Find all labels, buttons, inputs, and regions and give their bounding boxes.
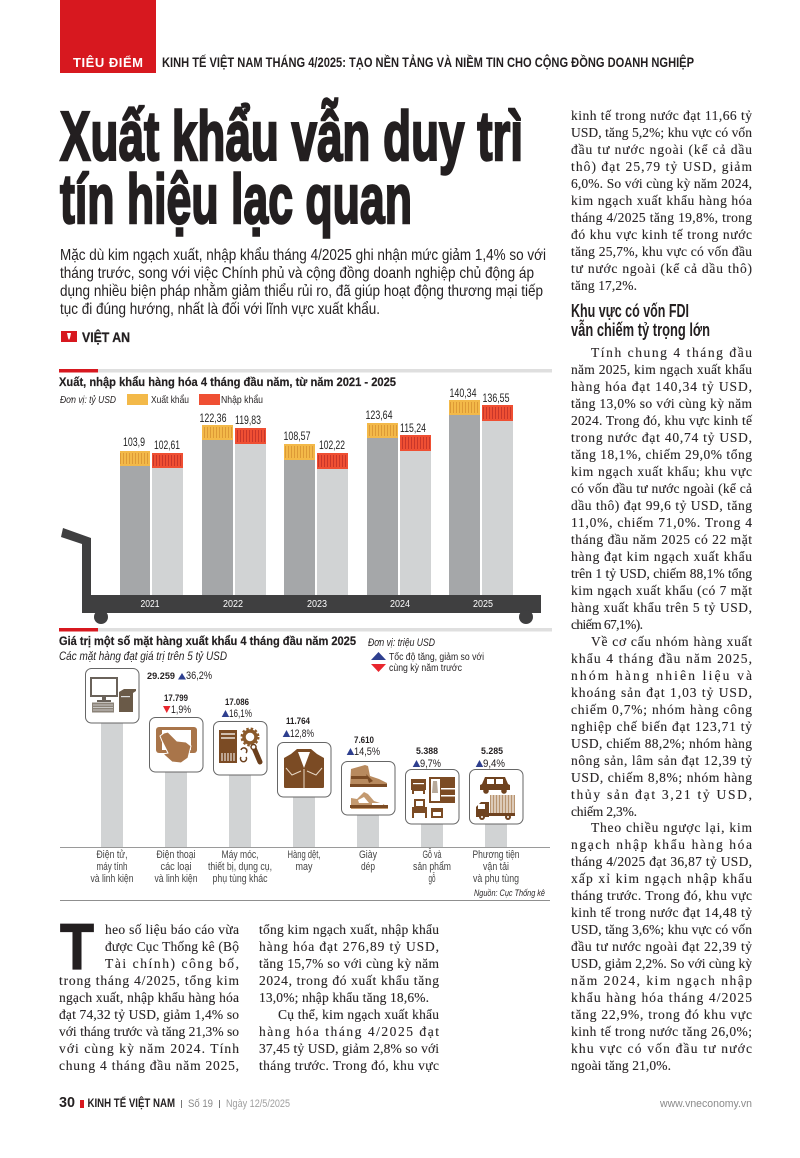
icon: shirt: [284, 749, 324, 788]
body column 3: top text: đó khu vực kinh tế trong nước: [571, 227, 752, 242]
body column 3: main text: nghiệp chế biến đạt 123,71 tỷ: [571, 719, 752, 734]
item: wood products: 5.388: [416, 746, 438, 757]
body column 3: main text: xấp xỉ kim ngạch nhập khẩu: [571, 871, 752, 886]
body column 3: main text: khoáng sản đạt 1,03 tỷ USD,: [571, 685, 752, 700]
item: machinery: phụ tùng khác: [212, 873, 268, 885]
body column 2: tổng kim ngạch xuất, nhập khẩu: [259, 922, 439, 937]
unit and legend: [368, 637, 484, 674]
body column 3: top text: 6,0%. So với cùng kỳ năm 2024,: [571, 176, 752, 191]
magazine name: KINH TẾ VIỆT NAM: [88, 1095, 175, 1110]
item: vehicles: và phụ tùng: [473, 873, 519, 885]
header: section tab and running title: [60, 0, 694, 73]
body column 1: ngạch xuất, nhập khẩu hàng hóa: [59, 990, 239, 1005]
item: vehicles: [470, 746, 523, 885]
body column 3: main text: Tính chung 4 tháng đầu: [591, 345, 752, 360]
item: phones: các loại: [160, 861, 192, 873]
bars 2022: 119,83: [235, 415, 261, 427]
body column 3: top text: tăng 25,7%, khu vực có vốn đầu: [571, 244, 752, 259]
body column 1: được Cục Thống kê (Bộ: [105, 939, 239, 954]
body column 2: 2024, trong đó xuất khẩu tăng: [259, 973, 439, 988]
item: footwear: [342, 735, 395, 873]
body column 3: top text: tăng 17,2%.: [571, 278, 637, 293]
bars 2023: [284, 431, 348, 610]
item: electronics and computers: 36,2%: [186, 670, 212, 682]
bars 2022: 2022: [223, 599, 243, 610]
body column 3: main text: tháng đầu năm 2025 có 22 mặt: [571, 532, 752, 547]
red section tab: [60, 0, 156, 73]
icon: furniture: [411, 777, 455, 818]
body column 3: main text: tháng 4/2025 đạt 36,87 tỷ USD,: [571, 854, 752, 869]
chart: main export items: [59, 628, 552, 901]
item: phones: [150, 693, 203, 885]
item: electronics and computers: máy tính: [96, 861, 128, 873]
item: vehicles: Phương tiện: [472, 849, 520, 861]
section label: TIÊU ĐIỂM: [73, 55, 143, 70]
item: wood products: [406, 746, 459, 885]
body column 2: 13,0%; nhập khẩu tăng 18,6%.: [259, 990, 429, 1005]
bars 2022: 122,36: [200, 413, 226, 425]
body column 3: main text: tăng 22,9%, trong đó khu vực: [571, 1007, 752, 1022]
body column 3: main text: 11,0%, chiếm 71,0%. Trong 4: [571, 515, 752, 530]
body column 3: top text: kim ngạch xuất khẩu hàng hóa: [571, 193, 752, 208]
body column 3: main text: [571, 345, 753, 1073]
body column 3: main text: 2024. Trong đó, khu vực kinh tế: [571, 413, 753, 428]
body column 3: main text: nông sản, lâm sản đạt 12,39 tỷ: [571, 753, 752, 768]
body column 3: main text: USD, tăng 3,6%; khu vực có vốn: [571, 922, 752, 937]
icon: computer: [91, 678, 136, 712]
bar chart: imports and exports 2021-2025: [59, 369, 552, 624]
body column 2: tháng trước. Trong đó, khu vực: [259, 1058, 439, 1073]
bars 2023: 2023: [307, 599, 327, 610]
body column 3: main text: chiếm 0,7%; nhóm hàng công: [571, 702, 752, 717]
item: textiles: 12,8%: [290, 728, 314, 740]
body column 1: chung 4 tháng đầu năm 2025,: [59, 1058, 239, 1073]
body column 3: main text: tăng 18,1%, chiếm 29,0% tổng: [571, 447, 752, 462]
byline: [61, 328, 130, 345]
footer: [59, 1094, 752, 1111]
title: Xuất khẩu vẫn duy trì: [60, 97, 523, 175]
body column 2: [259, 922, 439, 1073]
item: vehicles: 9,4%: [483, 758, 505, 770]
body column 3: main text: khẩu 4 tháng đầu năm 2025,: [571, 651, 752, 666]
icon: machinery: [219, 728, 260, 763]
drop cap: T: [60, 910, 94, 983]
body column 3: main text: thủy sản đạt 3,21 tỷ USD,: [571, 787, 752, 802]
body column 3: main text: ngoài tăng 21,0%.: [571, 1058, 671, 1073]
item: footwear: 7.610: [354, 735, 374, 746]
bars 2025: 140,34: [450, 388, 477, 400]
legend: [60, 394, 263, 406]
website: www.vneconomy.vn: [659, 1098, 752, 1110]
item: machinery: 16,1%: [229, 708, 252, 720]
body column 1: trong tháng 4/2025, tổng kim: [59, 973, 239, 988]
body column 3: main text: USD, chiếm 8,8%; nhóm hàng: [571, 770, 752, 785]
body column 2: tăng 15,7% so với cùng kỳ năm: [259, 956, 439, 971]
intro paragraph: tháng trước, song với việc Chính phủ và cộng đồng doanh nghiệp chủ động áp: [60, 265, 534, 282]
body column 3: main text: kinh tế trong nước tăng 26,0%;: [571, 1024, 752, 1039]
body column 3: main text: USD, giảm 2,2%. So với cùng kỳ: [571, 956, 752, 971]
icon: car and truck: [476, 777, 515, 820]
item: machinery: 17.086: [225, 697, 249, 708]
icon: shoes: [350, 765, 388, 809]
body column 3: main text: chiếm 2,3%.: [571, 804, 637, 819]
body column 2: Cụ thể, kim ngạch xuất khẩu: [278, 1007, 439, 1022]
subheading: Khu vực có vốn FDI: [571, 301, 689, 321]
body column 3: main text: năm 2024, kim ngạch nhập: [571, 973, 752, 988]
axis lines: [60, 847, 550, 901]
item: machinery: [208, 697, 272, 885]
item: machinery: thiết bị, dụng cụ,: [208, 861, 272, 873]
unit and legend: Tốc độ tăng, giảm so với: [389, 651, 484, 663]
body column 3: top text: kinh tế trong nước đạt 11,66 tỷ: [571, 108, 752, 123]
body column 3: main text: kim ngạch xuất khẩu; khu vực: [571, 464, 752, 479]
icon: hand on smartphone: [156, 727, 197, 763]
legend: Đơn vị: tỷ USD: [60, 394, 116, 406]
chart title: Xuất, nhập khẩu hàng hóa 4 tháng đầu năm, từ năm 2021 - 2025: [59, 375, 396, 389]
body column 1: với tháng trước và tăng 21,3% so: [59, 1024, 239, 1039]
body column 1: Tài chính) công bố,: [105, 956, 239, 971]
bars 2024: 2024: [390, 599, 410, 610]
body column 3: main text: hàng hóa đạt 140,34 tỷ USD,: [571, 379, 752, 394]
bars 2021: 102,61: [154, 440, 180, 452]
body column 1: [59, 910, 239, 1073]
subheading: vẫn chiếm tỷ trọng lớn: [571, 319, 710, 340]
body column 3: main text: năm 2025, kim ngạch xuất khẩu: [571, 362, 752, 377]
author name: VIỆT AN: [82, 328, 130, 345]
body column 3: top text: đầu tư nước ngoài (kể cả dầu: [571, 142, 752, 157]
bars 2025: [449, 388, 513, 610]
body column 3: main text: trên 1 tỷ USD, chiếm 88,1% tổng: [571, 566, 752, 581]
body column 1: với cùng kỳ năm 2024. Tính: [59, 1041, 239, 1056]
body column 3: main text: USD, chiếm 88,2%; nhóm hàng: [571, 736, 752, 751]
item: phones: và linh kiện: [154, 873, 198, 885]
bars 2022: [200, 413, 266, 610]
item: textiles: 11.764: [286, 716, 311, 727]
item: electronics and computers: và linh kiện: [90, 873, 134, 885]
body column 3: main text: trong nước đạt 40,74 tỷ USD,: [571, 430, 752, 445]
body column 3: main text: hàng đạt kim ngạch xuất khẩu: [571, 549, 752, 564]
item: vehicles: vận tải: [483, 861, 509, 873]
body column 3: main text: hàng xuất khẩu trên 5 tỷ USD,: [571, 600, 752, 615]
item: wood products: Gỗ và: [422, 848, 442, 861]
title: tín hiệu lạc quan: [60, 160, 412, 238]
body column 2: hàng hóa đạt 276,89 tỷ USD,: [259, 939, 439, 954]
bars 2021: 103,9: [123, 437, 145, 449]
bars 2025: 136,55: [482, 393, 510, 405]
body column 3: main text: Về cơ cấu nhóm hàng xuất: [591, 634, 752, 649]
body column 3: top text: USD, tăng 5,2%; khu vực có vốn: [571, 125, 752, 140]
item: phones: 1,9%: [171, 704, 191, 716]
icon: author pen: [61, 331, 77, 342]
bars 2023: 102,22: [319, 440, 345, 452]
intro paragraph: tục đi đúng hướng, nhất là đối với lĩnh vực xuất khẩu.: [60, 300, 380, 318]
body column 3: main text: nhóm hàng nhiên liệu và: [571, 668, 752, 683]
chart subtitle: Các mặt hàng đạt giá trị trên 5 tỷ USD: [59, 649, 227, 663]
body column 3: main text: đầu tư nước ngoài đạt 22,39 tỷ: [571, 939, 752, 954]
body column 1: heo số liệu báo cáo vừa: [105, 922, 239, 937]
source note: Nguồn: Cục Thống kê: [474, 888, 545, 899]
subheading: [571, 301, 710, 340]
body column 2: 37,45 tỷ USD, giảm 2,8% so với: [259, 1041, 439, 1056]
item: vehicles: 5.285: [481, 746, 504, 757]
item: wood products: gỗ: [428, 872, 436, 885]
body column 3: main text: kinh tế trong nước đạt 14,48 tỷ: [571, 905, 752, 920]
bars 2025: 2025: [473, 599, 493, 610]
item: textiles: Hàng dệt,: [288, 849, 320, 861]
body column 2: hàng hóa tháng 4/2025 đạt: [259, 1024, 439, 1039]
unit and legend: Đơn vị: triệu USD: [368, 637, 435, 649]
body column 3: main text: khẩu hàng hóa tháng 4/2025: [571, 990, 752, 1005]
item: electronics and computers: 29.259: [147, 671, 175, 682]
item: electronics and computers: Điện tử,: [96, 849, 128, 861]
issue number: Số 19: [188, 1098, 213, 1110]
bars 2024: [366, 410, 431, 610]
item: footwear: dép: [361, 861, 375, 873]
bars 2024: 115,24: [400, 423, 426, 435]
cart: handle and platform: [61, 528, 541, 624]
body column 3: main text: có vốn đầu tư nước ngoài (kể cả: [571, 481, 752, 496]
bars 2021: [120, 437, 183, 610]
body column 3: main text: khu vực có vốn đầu tư nước: [571, 1041, 752, 1056]
body column 3: main text: ngạch nhập khẩu hàng hóa: [571, 837, 752, 852]
item: phones: 17.799: [164, 693, 188, 704]
body column 1: đạt 74,32 tỷ USD, giảm 1,4% so: [59, 1007, 239, 1022]
intro paragraph: dụng nhiều biện pháp nhằm giảm thiểu rủi ro, đã giúp hoạt động thương mại tiếp: [60, 281, 543, 300]
item: machinery: Máy móc,: [222, 849, 258, 861]
item: textiles: may: [296, 861, 313, 873]
body column 3: top text: tư nước ngoài (kể cả dầu thô): [571, 261, 752, 276]
body column 3: main text: dầu thô) đạt 99,6 tỷ USD, tăng: [571, 498, 752, 513]
body column 3: main text: Theo chiều ngược lại, kim: [591, 820, 752, 835]
intro paragraph: [60, 246, 546, 318]
body column 3: main text: kim ngạch xuất khẩu (có 7 mặt: [571, 583, 752, 598]
bars 2023: 108,57: [284, 431, 310, 443]
body column 3: top text: [571, 108, 752, 293]
body column 3: top text: tháng 4/2025 tăng 19,8%, trong: [571, 210, 752, 225]
body column 3: main text: chiếm 67,1%).: [571, 617, 643, 632]
item: phones: Điện thoại: [156, 849, 196, 861]
title: [60, 97, 523, 238]
item: textiles: [278, 716, 331, 873]
intro paragraph: Mặc dù kim ngạch xuất, nhập khẩu tháng 4/2025 ghi nhận mức giảm 1,4% so với: [60, 246, 546, 264]
item: footwear: Giày: [359, 849, 377, 861]
item: wood products: 9,7%: [420, 758, 441, 770]
item: footwear: 14,5%: [354, 746, 380, 758]
legend: Nhập khẩu: [221, 394, 263, 406]
bars 2021: 2021: [140, 599, 160, 610]
body column 3: top text: thô) đạt 25,79 tỷ USD, giảm: [571, 159, 752, 174]
item: electronics and computers: [86, 668, 212, 885]
legend: Xuất khẩu: [151, 394, 189, 406]
page number: 30: [59, 1094, 75, 1111]
item: wood products: sản phẩm: [413, 861, 451, 873]
body column 3: main text: tháng trước. Trong đó, khu vực: [571, 888, 752, 903]
bars 2024: 123,64: [366, 410, 393, 422]
unit and legend: cùng kỳ năm trước: [389, 662, 462, 674]
chart title: Giá trị một số mặt hàng xuất khẩu 4 tháng đầu năm 2025: [59, 634, 356, 648]
body column 3: main text: tăng 13,0% so với cùng kỳ năm: [571, 396, 752, 411]
issue date: Ngày 12/5/2025: [226, 1098, 290, 1110]
